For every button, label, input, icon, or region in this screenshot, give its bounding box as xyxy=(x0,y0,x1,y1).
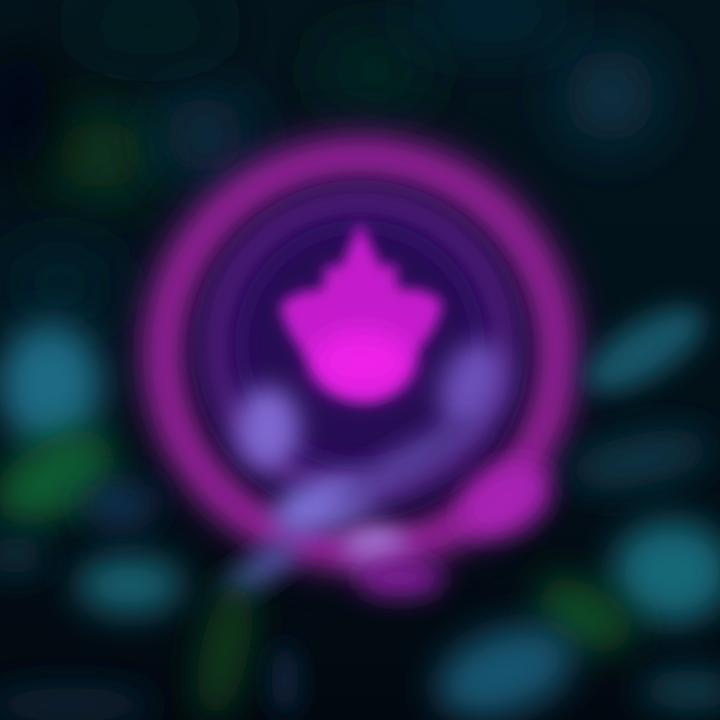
foreground lavender petals xyxy=(218,332,565,605)
emblem: magenta ring and leaf xyxy=(155,147,565,557)
leaf xyxy=(280,222,442,402)
foreground foliage right xyxy=(423,290,720,720)
inner disc xyxy=(190,180,530,520)
outer glow xyxy=(155,147,565,557)
leaf bright core xyxy=(312,330,412,394)
inner concentric ring xyxy=(217,202,503,488)
outer ring xyxy=(164,158,556,550)
inner dark ring xyxy=(242,227,478,463)
foreground foliage left xyxy=(0,323,299,720)
background bokeh foliage xyxy=(0,0,656,323)
